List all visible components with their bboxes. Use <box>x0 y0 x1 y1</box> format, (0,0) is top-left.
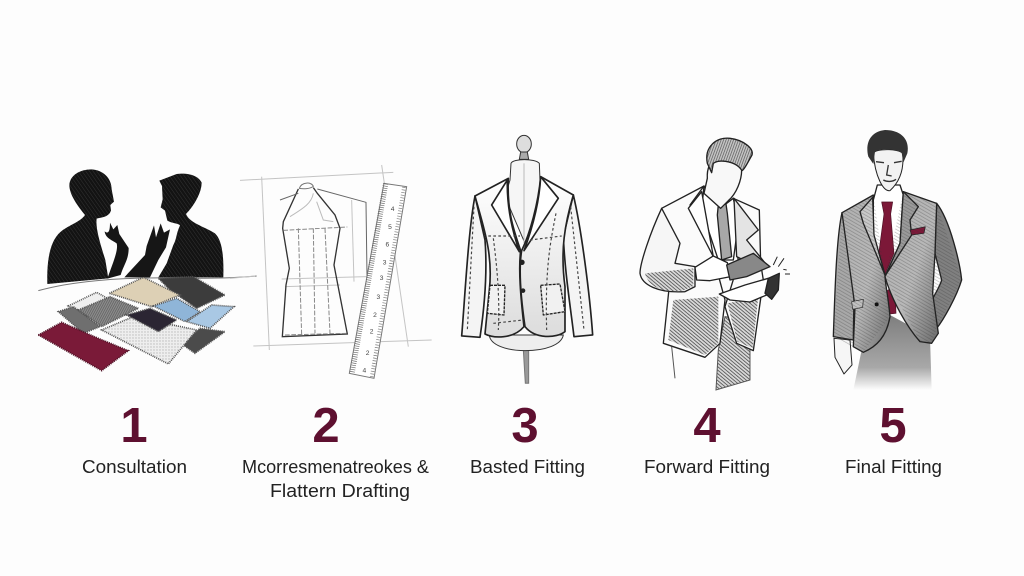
icon: two silhouettes in conversation with fabric swatches <box>38 169 257 371</box>
fabric swatches <box>38 277 234 371</box>
hand: right figure <box>124 223 170 277</box>
ruler: 4 <box>391 206 395 213</box>
icon: pattern draft with ruler <box>230 165 432 378</box>
mannequin <box>489 135 563 383</box>
silhouette: right tailor <box>158 174 223 277</box>
label: Consultation: Consultation <box>82 457 187 477</box>
ruler <box>349 183 407 378</box>
neck and shirt <box>873 185 903 277</box>
right sleeve <box>927 203 962 328</box>
icon: man in finished suit with burgundy tie <box>833 130 962 390</box>
label: Measurements and Pattern Drafting: Mcorresmenatreokes & <box>242 457 429 477</box>
jacket <box>462 177 593 337</box>
ruler: 4 <box>362 367 366 374</box>
head <box>873 150 903 191</box>
label: Forward Fitting: Forward Fitting <box>644 457 770 477</box>
hip pocket <box>852 299 863 309</box>
hands <box>695 256 731 281</box>
left sleeve <box>833 213 854 340</box>
number 4: 4 <box>693 399 721 453</box>
tie <box>878 202 894 274</box>
panel: step 3 basted fitting <box>462 135 593 477</box>
ruler: 2 <box>366 350 370 357</box>
lapel <box>688 192 713 257</box>
panel: step 2 measurements and pattern drafting <box>230 165 432 501</box>
suit hatching <box>833 192 962 352</box>
label: Measurements and Pattern Drafting: Flattern Drafting <box>270 481 410 501</box>
pocket square <box>910 227 925 235</box>
jacket body <box>640 138 779 357</box>
panel: step 4 forward fitting <box>640 138 790 477</box>
ruler: 2 <box>370 329 374 336</box>
jacket left <box>842 195 890 352</box>
panel: step 5 final fitting <box>833 130 962 477</box>
lapels <box>860 197 885 275</box>
shirt <box>702 186 738 260</box>
ruler: 5 <box>388 224 392 231</box>
hand <box>834 338 852 374</box>
number 2: 2 <box>312 399 340 453</box>
facial features <box>876 161 902 181</box>
head <box>704 161 742 208</box>
jacket right <box>885 192 938 343</box>
label: Basted Fitting: Basted Fitting <box>470 457 585 477</box>
draft grid <box>230 165 432 350</box>
sleeve <box>640 208 695 292</box>
buttons <box>519 260 525 293</box>
ruler: 3 <box>376 294 380 301</box>
icon: man adjusting jacket sketch <box>640 138 790 390</box>
label: Final Fitting: Final Fitting <box>845 457 942 477</box>
ruler: 3 <box>383 259 387 266</box>
basting stitches <box>467 207 584 330</box>
jacket button <box>875 302 879 306</box>
number 1: 1 <box>120 399 148 453</box>
label: Measurements and Pattern Drafting <box>242 457 429 501</box>
panel: step 1 consultation <box>38 169 257 477</box>
sparkle marks <box>773 257 790 274</box>
table edge <box>38 276 257 291</box>
number 3: 3 <box>511 399 539 453</box>
ruler: 2 <box>373 312 377 319</box>
ruler: 3 <box>380 275 384 282</box>
trousers <box>672 317 750 390</box>
number 5: 5 <box>879 399 907 453</box>
tie <box>717 204 732 260</box>
icon: basted jacket on mannequin <box>462 135 593 383</box>
ruler: 6 <box>385 242 389 249</box>
silhouette: left client <box>47 169 114 284</box>
garment pattern outline <box>280 183 367 337</box>
trousers <box>853 315 932 390</box>
hand: left figure <box>105 223 129 279</box>
